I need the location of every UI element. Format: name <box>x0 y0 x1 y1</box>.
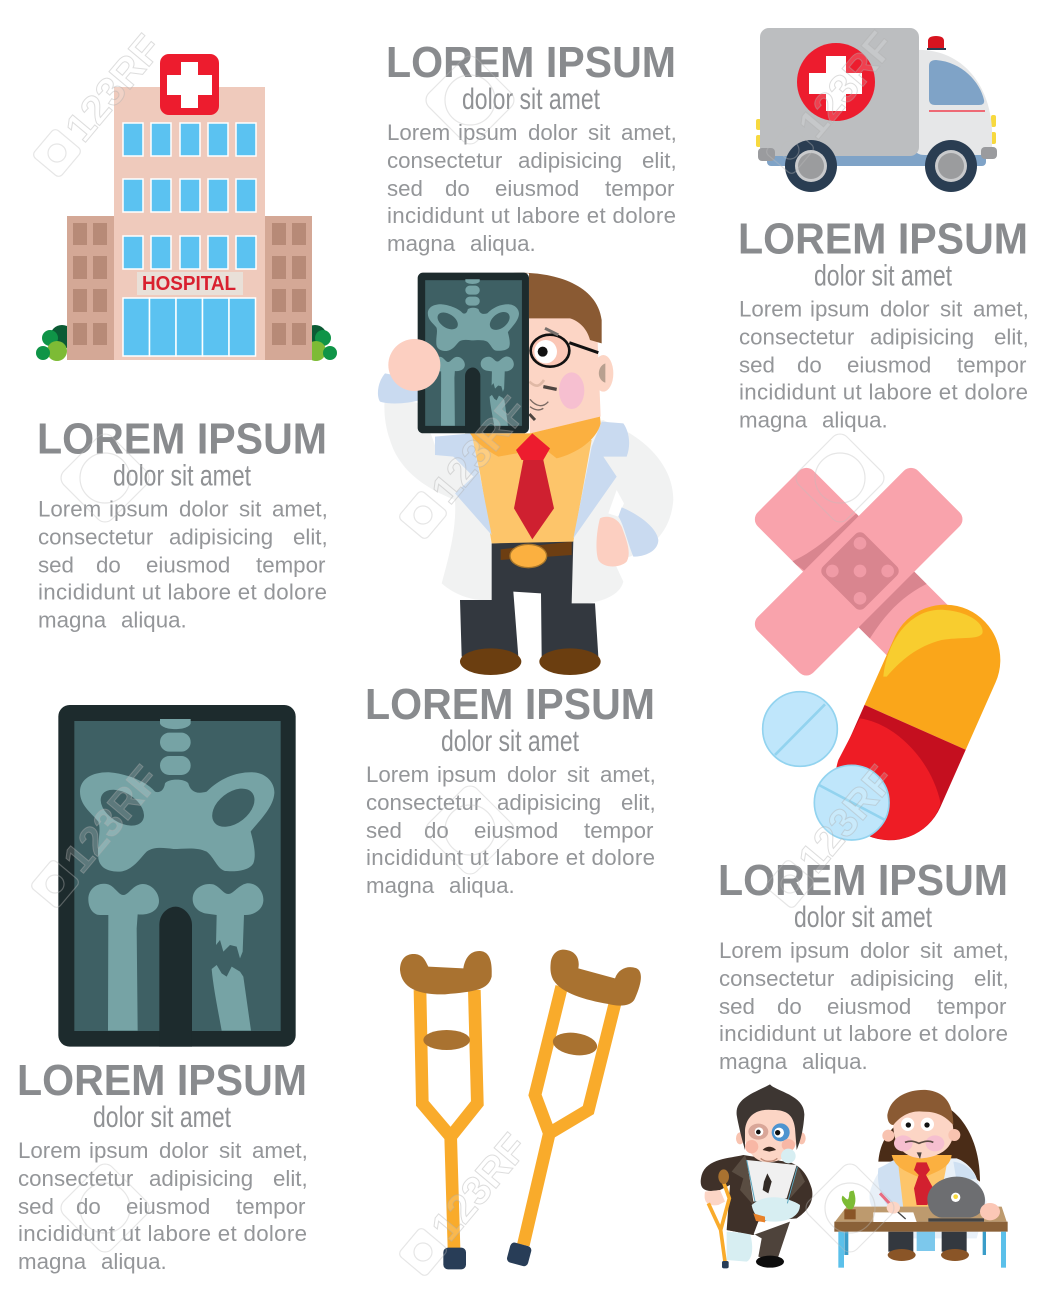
text block: under hospital: LOREM IPSUM <box>37 414 327 464</box>
watermark: hospital: 123RF <box>57 27 171 150</box>
text block: right under pills: LOREM IPSUM <box>718 856 1008 905</box>
text block: top center: sed <box>387 176 423 201</box>
text block: under ambulance: consectetur <box>739 324 855 350</box>
text block: center under doctor: magna <box>366 873 435 898</box>
head <box>527 317 601 433</box>
siren <box>927 36 946 50</box>
text block: right under pills: consectetur <box>719 966 835 991</box>
necktie <box>514 433 554 539</box>
text block: under hospital: sed <box>38 552 74 578</box>
text block: under hospital: ipsum <box>109 496 168 522</box>
text block: center under doctor: sit <box>567 762 590 787</box>
doctor at desk <box>834 1090 1008 1268</box>
text block: top center: dolor sit amet <box>462 83 601 116</box>
watermark: ambulance <box>763 24 904 179</box>
text block: center under doctor: eiusmod <box>474 818 558 843</box>
bandage strip front <box>751 464 967 680</box>
text block: bottom left: elit, <box>273 1166 308 1191</box>
text block: under ambulance: Lorem <box>739 296 802 322</box>
text block: top center: incididunt ut labore et dolore <box>387 203 676 228</box>
hospital illustration <box>36 54 337 361</box>
ear <box>593 355 613 392</box>
desk <box>834 1207 1008 1268</box>
watermark: doctor: 123RF <box>423 389 537 512</box>
text block: bottom left <box>17 1056 308 1274</box>
text block: top center: LOREM IPSUM <box>386 38 676 87</box>
text block: right under pills: magna <box>719 1049 788 1074</box>
text block: bottom left: LOREM IPSUM <box>17 1056 307 1105</box>
text block: under hospital: consectetur <box>38 524 154 550</box>
text block: right under pills: do <box>777 994 802 1019</box>
paper and pen <box>873 1193 917 1222</box>
text block: under hospital: Lorem <box>38 496 101 522</box>
text block: right under pills: dolor <box>860 938 910 963</box>
cargo box <box>760 28 919 156</box>
hair <box>508 273 602 343</box>
text block: under hospital <box>37 414 328 632</box>
text block: under hospital: aliqua. <box>121 608 187 632</box>
hospital sign: HOSPITAL <box>142 272 236 295</box>
watermark: doctor <box>396 389 537 544</box>
text block: under hospital: adipisicing <box>169 524 273 550</box>
tail and head lights <box>756 115 996 147</box>
watermark: crutches <box>396 1126 537 1281</box>
text block: bottom left: magna <box>18 1249 87 1274</box>
bushes <box>36 325 337 361</box>
text block: center under doctor: adipisicing <box>497 790 601 815</box>
trousers <box>460 540 598 657</box>
text block: under hospital: magna <box>38 608 107 632</box>
ambulance illustration <box>756 28 997 192</box>
watermark: ambulance: 123RF <box>790 24 904 147</box>
text block: center under doctor: Lorem <box>366 762 429 787</box>
patient head <box>743 1107 798 1162</box>
raised hand <box>388 339 440 391</box>
text block: center under doctor: amet, <box>600 762 656 787</box>
text block: center under doctor: incididunt ut labore et dolore <box>366 845 655 870</box>
cab window <box>929 60 984 105</box>
large x-ray film <box>58 705 296 1047</box>
text block: top center: consectetur <box>387 148 503 173</box>
text block: top center: dolor <box>528 120 578 145</box>
watermark: x-ray <box>28 758 169 913</box>
text block: center under doctor: sed <box>366 818 402 843</box>
text block: bottom left: dolor sit amet <box>93 1101 232 1134</box>
text block: top center: Lorem <box>387 120 450 145</box>
text block: under ambulance: LOREM IPSUM <box>738 214 1028 264</box>
text block: right under pills: amet, <box>953 938 1009 963</box>
main tower <box>114 87 265 360</box>
text block: center under doctor: aliqua. <box>449 873 515 898</box>
text block: bottom left: Lorem <box>18 1138 81 1163</box>
patient with crutch and sling <box>701 1084 812 1268</box>
watermark: x-ray: 123RF <box>55 758 169 881</box>
text block: under hospital: tempor <box>256 552 326 578</box>
chassis <box>767 150 986 166</box>
patient and doctor at desk <box>701 1084 1008 1268</box>
text block: bottom left: dolor <box>159 1138 209 1163</box>
text block: bottom left: ipsum <box>89 1138 148 1163</box>
laptop <box>927 1177 985 1222</box>
text block: under ambulance: dolor <box>880 296 930 322</box>
capsule <box>817 587 1018 858</box>
text block: center under doctor: do <box>424 818 449 843</box>
red cross sign <box>160 54 219 115</box>
belt <box>501 542 572 568</box>
faint camera watermarks <box>57 52 898 1256</box>
text block: right under pills: tempor <box>937 994 1007 1019</box>
text block: top center: ipsum <box>458 120 517 145</box>
text block: under hospital: elit, <box>293 524 328 550</box>
text block: center under doctor: dolor sit amet <box>441 725 580 758</box>
text block: under ambulance: aliqua. <box>822 408 888 432</box>
text block: bottom left: consectetur <box>18 1166 134 1191</box>
text block: right under pills <box>718 856 1009 1074</box>
text block: right under pills: Lorem <box>719 938 782 963</box>
mouth and moustache <box>529 380 557 420</box>
text block: center under doctor: consectetur <box>366 790 482 815</box>
text block: bottom left: sit <box>219 1138 242 1163</box>
text block: center under doctor <box>365 680 656 898</box>
text block: under hospital: dolor sit amet <box>113 460 252 492</box>
cab <box>915 50 992 155</box>
text block: bottom left: eiusmod <box>126 1194 210 1219</box>
text block: under ambulance: ipsum <box>810 296 869 322</box>
bandage pad <box>819 530 901 612</box>
text block: under hospital: amet, <box>272 496 328 522</box>
text block: top center: aliqua. <box>470 231 536 256</box>
text block: bottom left: adipisicing <box>149 1166 253 1191</box>
lab coat <box>384 397 673 605</box>
text block: bottom left: do <box>76 1194 101 1219</box>
watermark: pills: 123RF <box>790 758 904 881</box>
watermark: hospital <box>30 27 171 182</box>
text block: right under pills: elit, <box>974 966 1009 991</box>
text block: under ambulance: tempor <box>957 352 1027 378</box>
text block: right under pills: sed <box>719 994 755 1019</box>
bumpers <box>758 147 997 161</box>
doctor holding x-ray <box>378 273 673 675</box>
text block: top center: sit <box>588 120 611 145</box>
text block: right under pills: dolor sit amet <box>794 901 933 934</box>
text block: right under pills: sit <box>920 938 943 963</box>
wheels <box>785 140 977 192</box>
text block: top center: elit, <box>642 148 677 173</box>
collar <box>470 417 601 458</box>
small x-ray film <box>418 273 529 433</box>
side wings <box>67 216 312 360</box>
text block: under ambulance: eiusmod <box>847 352 931 378</box>
text block: under ambulance: adipisicing <box>870 324 974 350</box>
trousers under desk <box>888 1232 969 1261</box>
text block: top center <box>386 38 677 256</box>
sling <box>752 1197 800 1222</box>
text block: right under pills: adipisicing <box>850 966 954 991</box>
lapels <box>732 1155 805 1205</box>
hand on hip <box>597 507 658 566</box>
crutches <box>400 950 641 1269</box>
entrance doors <box>123 298 256 356</box>
text block: center under doctor: ipsum <box>437 762 496 787</box>
text block: bottom left: tempor <box>236 1194 306 1219</box>
text block: under ambulance <box>738 214 1029 432</box>
shirt <box>472 435 592 543</box>
coat lapels <box>435 422 629 538</box>
text block: center under doctor: LOREM IPSUM <box>365 680 655 729</box>
text block: bottom left: amet, <box>252 1138 308 1163</box>
plant <box>842 1190 856 1219</box>
text block: under ambulance: magna <box>739 408 808 432</box>
tablet one <box>763 692 837 766</box>
glasses <box>531 328 598 367</box>
patient legs <box>727 1222 790 1262</box>
text block: top center: amet, <box>621 120 677 145</box>
text block: under ambulance: sit <box>940 296 963 322</box>
patient arm and crutch <box>705 1190 725 1205</box>
patient jacket <box>701 1155 812 1235</box>
bandage shadows <box>792 510 932 640</box>
text block: bottom left: sed <box>18 1194 54 1219</box>
watermark: crutches: 123RF <box>423 1126 537 1249</box>
text block: under hospital: dolor <box>179 496 229 522</box>
text block: under hospital: eiusmod <box>146 552 230 578</box>
text block: right under pills: eiusmod <box>827 994 911 1019</box>
text block: under ambulance: do <box>797 352 822 378</box>
text block: top center: magna <box>387 231 456 256</box>
text block: right under pills: ipsum <box>790 938 849 963</box>
text block: bottom left: incididunt ut labore et dolore <box>18 1221 307 1246</box>
bandage and pills <box>754 468 1000 841</box>
raised sleeve cuff <box>378 373 420 403</box>
text block: under hospital: incididunt ut labore et dolore <box>38 580 327 604</box>
text block: right under pills: incididunt ut labore et dolore <box>719 1021 1008 1046</box>
bruised eye <box>772 1123 790 1141</box>
text block: center under doctor: elit, <box>621 790 656 815</box>
left crutch <box>400 951 492 1269</box>
text block: under ambulance: elit, <box>994 324 1029 350</box>
text block: under hospital: sit <box>239 496 262 522</box>
text block: top center: eiusmod <box>495 176 579 201</box>
text block: top center: tempor <box>605 176 675 201</box>
shoes <box>460 648 601 675</box>
text block: under hospital: do <box>96 552 121 578</box>
text block: under ambulance: incididunt ut labore et dolore <box>739 380 1028 404</box>
tablet two <box>814 765 889 840</box>
right crutch <box>506 950 641 1267</box>
watermark: pills <box>763 758 904 913</box>
red cross emblem <box>797 43 875 121</box>
patient shirt and tie <box>747 1160 797 1202</box>
text block: right under pills: aliqua. <box>802 1049 868 1074</box>
text block: under ambulance: sed <box>739 352 775 378</box>
text block: top center: do <box>445 176 470 201</box>
text block: center under doctor: dolor <box>507 762 557 787</box>
text block: under ambulance: amet, <box>973 296 1029 322</box>
text block: top center: adipisicing <box>518 148 622 173</box>
cheek <box>559 372 584 409</box>
text block: under ambulance: dolor sit amet <box>814 260 953 292</box>
tower windows <box>123 123 256 269</box>
bandage strip back <box>751 464 967 680</box>
text block: bottom left: aliqua. <box>101 1249 167 1274</box>
text block: center under doctor: tempor <box>584 818 654 843</box>
